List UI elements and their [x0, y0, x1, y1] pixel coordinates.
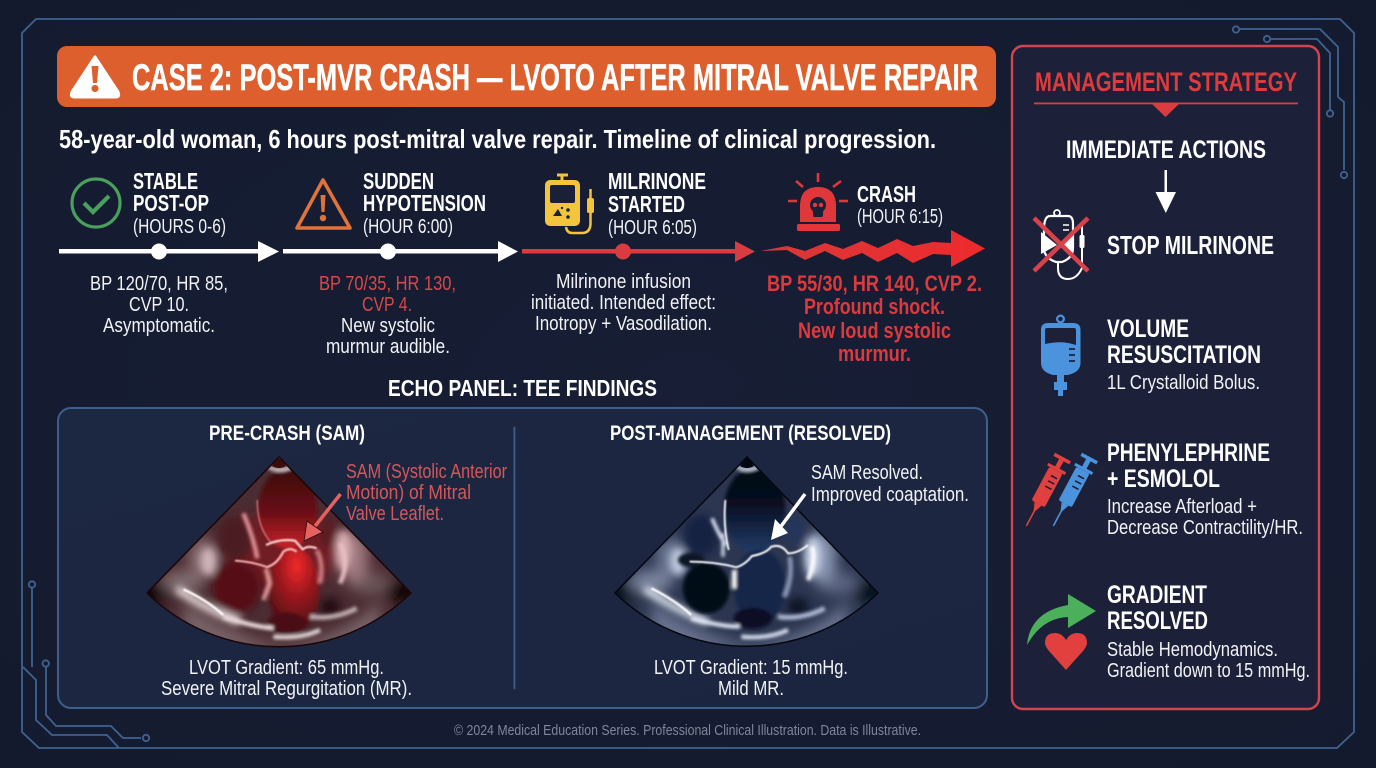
caption: post-management: LVOT Gradient: 15 mmHg. [654, 657, 848, 679]
step 1 vitals: Asymptomatic. [103, 315, 215, 337]
icon: red syringe [1018, 452, 1072, 531]
step 3 description: initiated. Intended effect: [531, 292, 716, 314]
step 1 heading: POST-OP [133, 190, 209, 216]
echo image: post-management [614, 456, 879, 647]
action: phenylephrine + esmolol [1018, 439, 1303, 539]
icon: green check [72, 179, 120, 227]
step 2 heading [363, 168, 486, 238]
arrow: step 1 [59, 241, 279, 262]
arrow: down [1156, 170, 1176, 213]
action: stop milrinone [1034, 210, 1274, 279]
step 4 heading: CRASH [857, 181, 916, 207]
step 3 description: Milrinone infusion [556, 271, 691, 293]
annotation: SAM callout: SAM (Systolic Anterior [346, 461, 507, 483]
step 4 vitals: Profound shock. [804, 294, 945, 319]
label: PHENYLEPHRINE [1107, 439, 1270, 467]
management heading: MANAGEMENT STRATEGY [1035, 67, 1297, 97]
arrow: step 2 [283, 241, 518, 262]
step 4 vitals: New loud systolic [798, 318, 951, 343]
step 2 vitals: New systolic [341, 315, 435, 337]
step 1 heading: (HOURS 0-6) [133, 216, 226, 238]
step 3 heading: STARTED [608, 191, 685, 217]
management heading [1034, 67, 1298, 117]
arrow: crash zigzag [761, 230, 985, 267]
step 3 heading: MILRINONE [608, 168, 706, 194]
step 3 heading [608, 168, 706, 239]
step 2 vitals [319, 273, 456, 358]
echo panel heading: ECHO PANEL: TEE FINDINGS [388, 375, 657, 401]
step 4 vitals: murmur. [838, 341, 911, 366]
step 4 vitals [767, 271, 982, 366]
title banner [57, 46, 996, 107]
step 1 vitals: CVP 10. [129, 294, 189, 316]
annotation: SAM resolved callout [771, 462, 969, 540]
timeline step 2: sudden hypotension [283, 168, 518, 358]
footer: © 2024 Medical Education Series. Professional Clinical Illustration. Data is Illustrative. [454, 723, 921, 739]
label: 1L Crystalloid Bolus. [1107, 372, 1260, 394]
label: Decrease Contractility/HR. [1107, 517, 1303, 539]
icon: green arrow [1027, 594, 1096, 645]
icon: infusion pump [545, 175, 594, 233]
annotation: SAM resolved callout: Improved coaptation. [811, 484, 969, 506]
step 1 vitals [90, 273, 228, 337]
panel: management strategy [1012, 46, 1319, 709]
caption: pre-crash: LVOT Gradient: 65 mmHg. [189, 657, 384, 679]
step 1 heading: STABLE [133, 168, 198, 194]
step 2 heading: SUDDEN [363, 168, 434, 194]
title text: CASE 2: POST-MVR CRASH — LVOTO AFTER MITRAL VALVE REPAIR [132, 57, 978, 98]
step 2 heading: HYPOTENSION [363, 190, 486, 216]
subtitle: 58-year-old woman, 6 hours post-mitral valve repair. Timeline of clinical progression. [59, 124, 936, 154]
step 4 heading: (HOUR 6:15) [857, 206, 943, 228]
immediate actions: IMMEDIATE ACTIONS [1066, 136, 1266, 164]
icon: crossed-out infusion bag [1034, 210, 1088, 279]
timeline step 3: milrinone started [522, 168, 755, 335]
step 2 vitals: murmur audible. [326, 336, 450, 358]
label: RESUSCITATION [1107, 341, 1261, 369]
annotation: SAM callout [304, 461, 507, 541]
icon: IV bag [1041, 316, 1080, 396]
label: STOP MILRINONE [1107, 232, 1274, 260]
label [1107, 315, 1261, 394]
label: RESOLVED [1107, 607, 1208, 635]
caption: post-management [654, 657, 848, 700]
step 3 heading: (HOUR 6:05) [608, 217, 697, 239]
icon: warning triangle [71, 57, 119, 97]
post-management heading: POST-MANAGEMENT (RESOLVED) [610, 422, 891, 445]
caption: post-management: Mild MR. [718, 678, 784, 700]
step 2 heading: (HOUR 6:00) [363, 216, 453, 238]
icon: orange warning [297, 180, 350, 228]
action: volume resuscitation [1041, 315, 1261, 396]
step 3 description: Inotropy + Vasodilation. [535, 313, 712, 335]
caption: pre-crash: Severe Mitral Regurgitation (MR). [161, 678, 412, 700]
annotation: SAM resolved callout: SAM Resolved. [811, 462, 923, 484]
label: + ESMOLOL [1107, 465, 1220, 493]
icon: heart [1045, 633, 1087, 670]
step 1 vitals: BP 120/70, HR 85, [90, 273, 228, 295]
icon: alarm siren with skull [788, 173, 848, 231]
label: Stable Hemodynamics. [1107, 639, 1278, 661]
pre-crash heading: PRE-CRASH (SAM) [209, 422, 365, 445]
panel: echo findings [58, 408, 987, 708]
label: Gradient down to 15 mmHg. [1107, 660, 1310, 682]
step 4 heading [857, 181, 943, 228]
icon: blue syringe [1045, 452, 1099, 531]
step 1 heading [133, 168, 226, 238]
step 3 description [531, 271, 716, 335]
label: VOLUME [1107, 315, 1189, 343]
label: Increase Afterload + [1107, 496, 1257, 518]
step 4 vitals: BP 55/30, HR 140, CVP 2. [767, 271, 982, 296]
label [1107, 581, 1310, 682]
timeline step 1: stable post-op [59, 168, 279, 337]
label [1107, 439, 1303, 539]
annotation: SAM callout: Valve Leaflet. [346, 503, 444, 525]
action: gradient resolved [1027, 581, 1310, 682]
step 2 vitals: BP 70/35, HR 130, [319, 273, 456, 295]
echo image: pre-crash SAM [146, 456, 412, 648]
step 2 vitals: CVP 4. [362, 294, 412, 316]
annotation: SAM callout: Motion) of Mitral [346, 482, 471, 504]
label: GRADIENT [1107, 581, 1207, 609]
caption: pre-crash [161, 657, 412, 700]
arrow: step 3 [522, 241, 755, 262]
timeline step 4: crash [761, 173, 985, 366]
